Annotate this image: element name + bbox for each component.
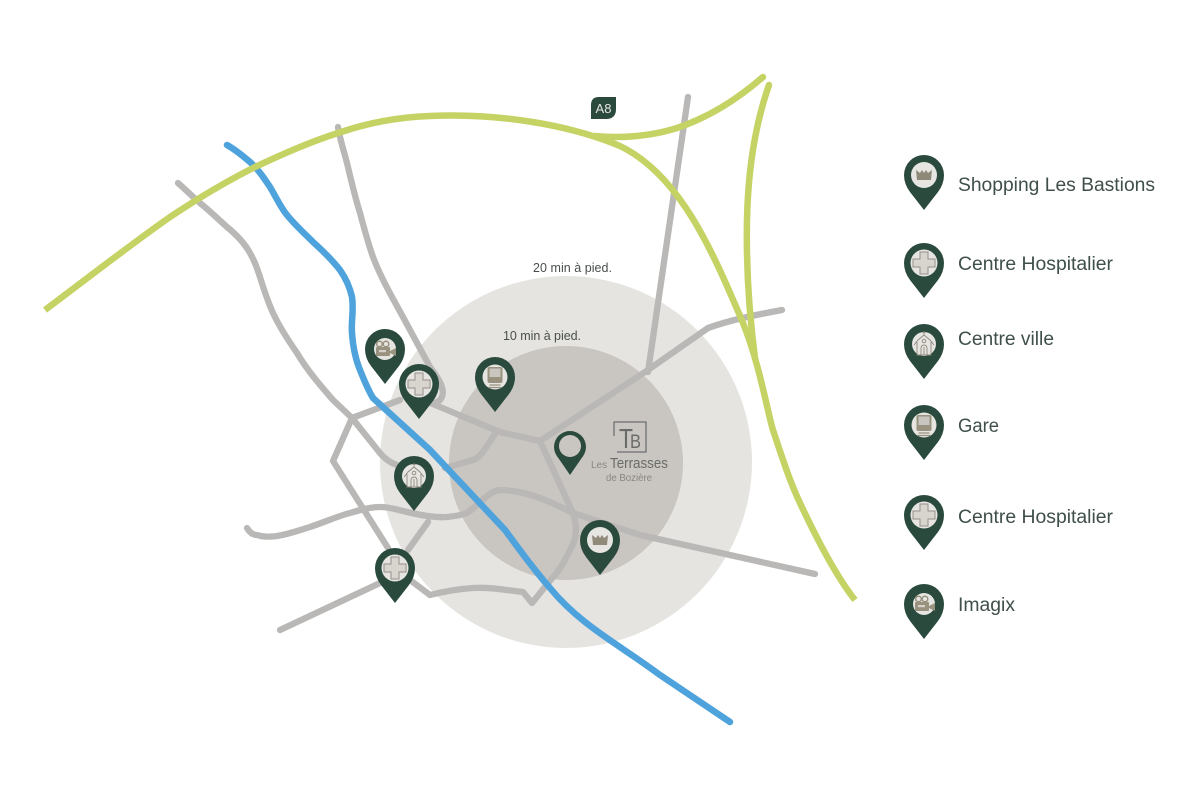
legend — [904, 155, 1155, 639]
legend item: Shopping Les Bastions — [904, 155, 1155, 210]
zone: 20 min walking radius — [380, 276, 752, 648]
motorway A8 — [45, 77, 855, 600]
map pin: cinema — [365, 329, 405, 384]
A8 badge: A8 — [596, 101, 611, 116]
logo: Les Terrasses de Bozière: de Bozière — [606, 473, 652, 484]
map pin: town centre — [394, 456, 434, 511]
logo: Les Terrasses de Bozière: B — [630, 432, 641, 453]
legend item: Imagix — [904, 584, 1016, 639]
legend item: Centre Hospitalier: Centre Hospitalier — [958, 254, 1114, 275]
logo: Les Terrasses de Bozière — [591, 422, 668, 484]
legend item: Centre Hospitalier: Centre Hospitalier — [958, 507, 1114, 528]
map pin: hospital south — [375, 548, 415, 603]
logo: Les Terrasses de Bozière: T — [619, 423, 633, 454]
map pin: shopping — [580, 520, 620, 575]
legend item: Centre ville: Centre ville — [958, 329, 1054, 350]
label: 20 min: 20 min à pied. — [533, 261, 612, 275]
map pin: hospital north — [399, 364, 439, 419]
river — [227, 145, 730, 722]
label: 10 min: 10 min à pied. — [503, 329, 581, 343]
legend item: Gare — [904, 405, 999, 460]
road network — [178, 97, 815, 630]
legend item: Shopping Les Bastions: Shopping Les Bastions — [958, 175, 1155, 196]
A8 badge — [591, 97, 616, 119]
legend item: Centre ville — [904, 324, 1054, 379]
map pin: station — [475, 357, 515, 412]
legend item: Imagix: Imagix — [958, 595, 1016, 616]
logo: Les Terrasses de Bozière: Terrasses — [610, 455, 668, 472]
zone: 10 min walking radius — [449, 346, 683, 580]
legend item: Centre Hospitalier — [904, 243, 1114, 298]
logo: Les Terrasses de Bozière: Les — [591, 460, 607, 471]
legend item: Gare: Gare — [958, 416, 999, 437]
legend item: Centre Hospitalier — [904, 495, 1114, 550]
map pin: residence — [554, 431, 586, 475]
